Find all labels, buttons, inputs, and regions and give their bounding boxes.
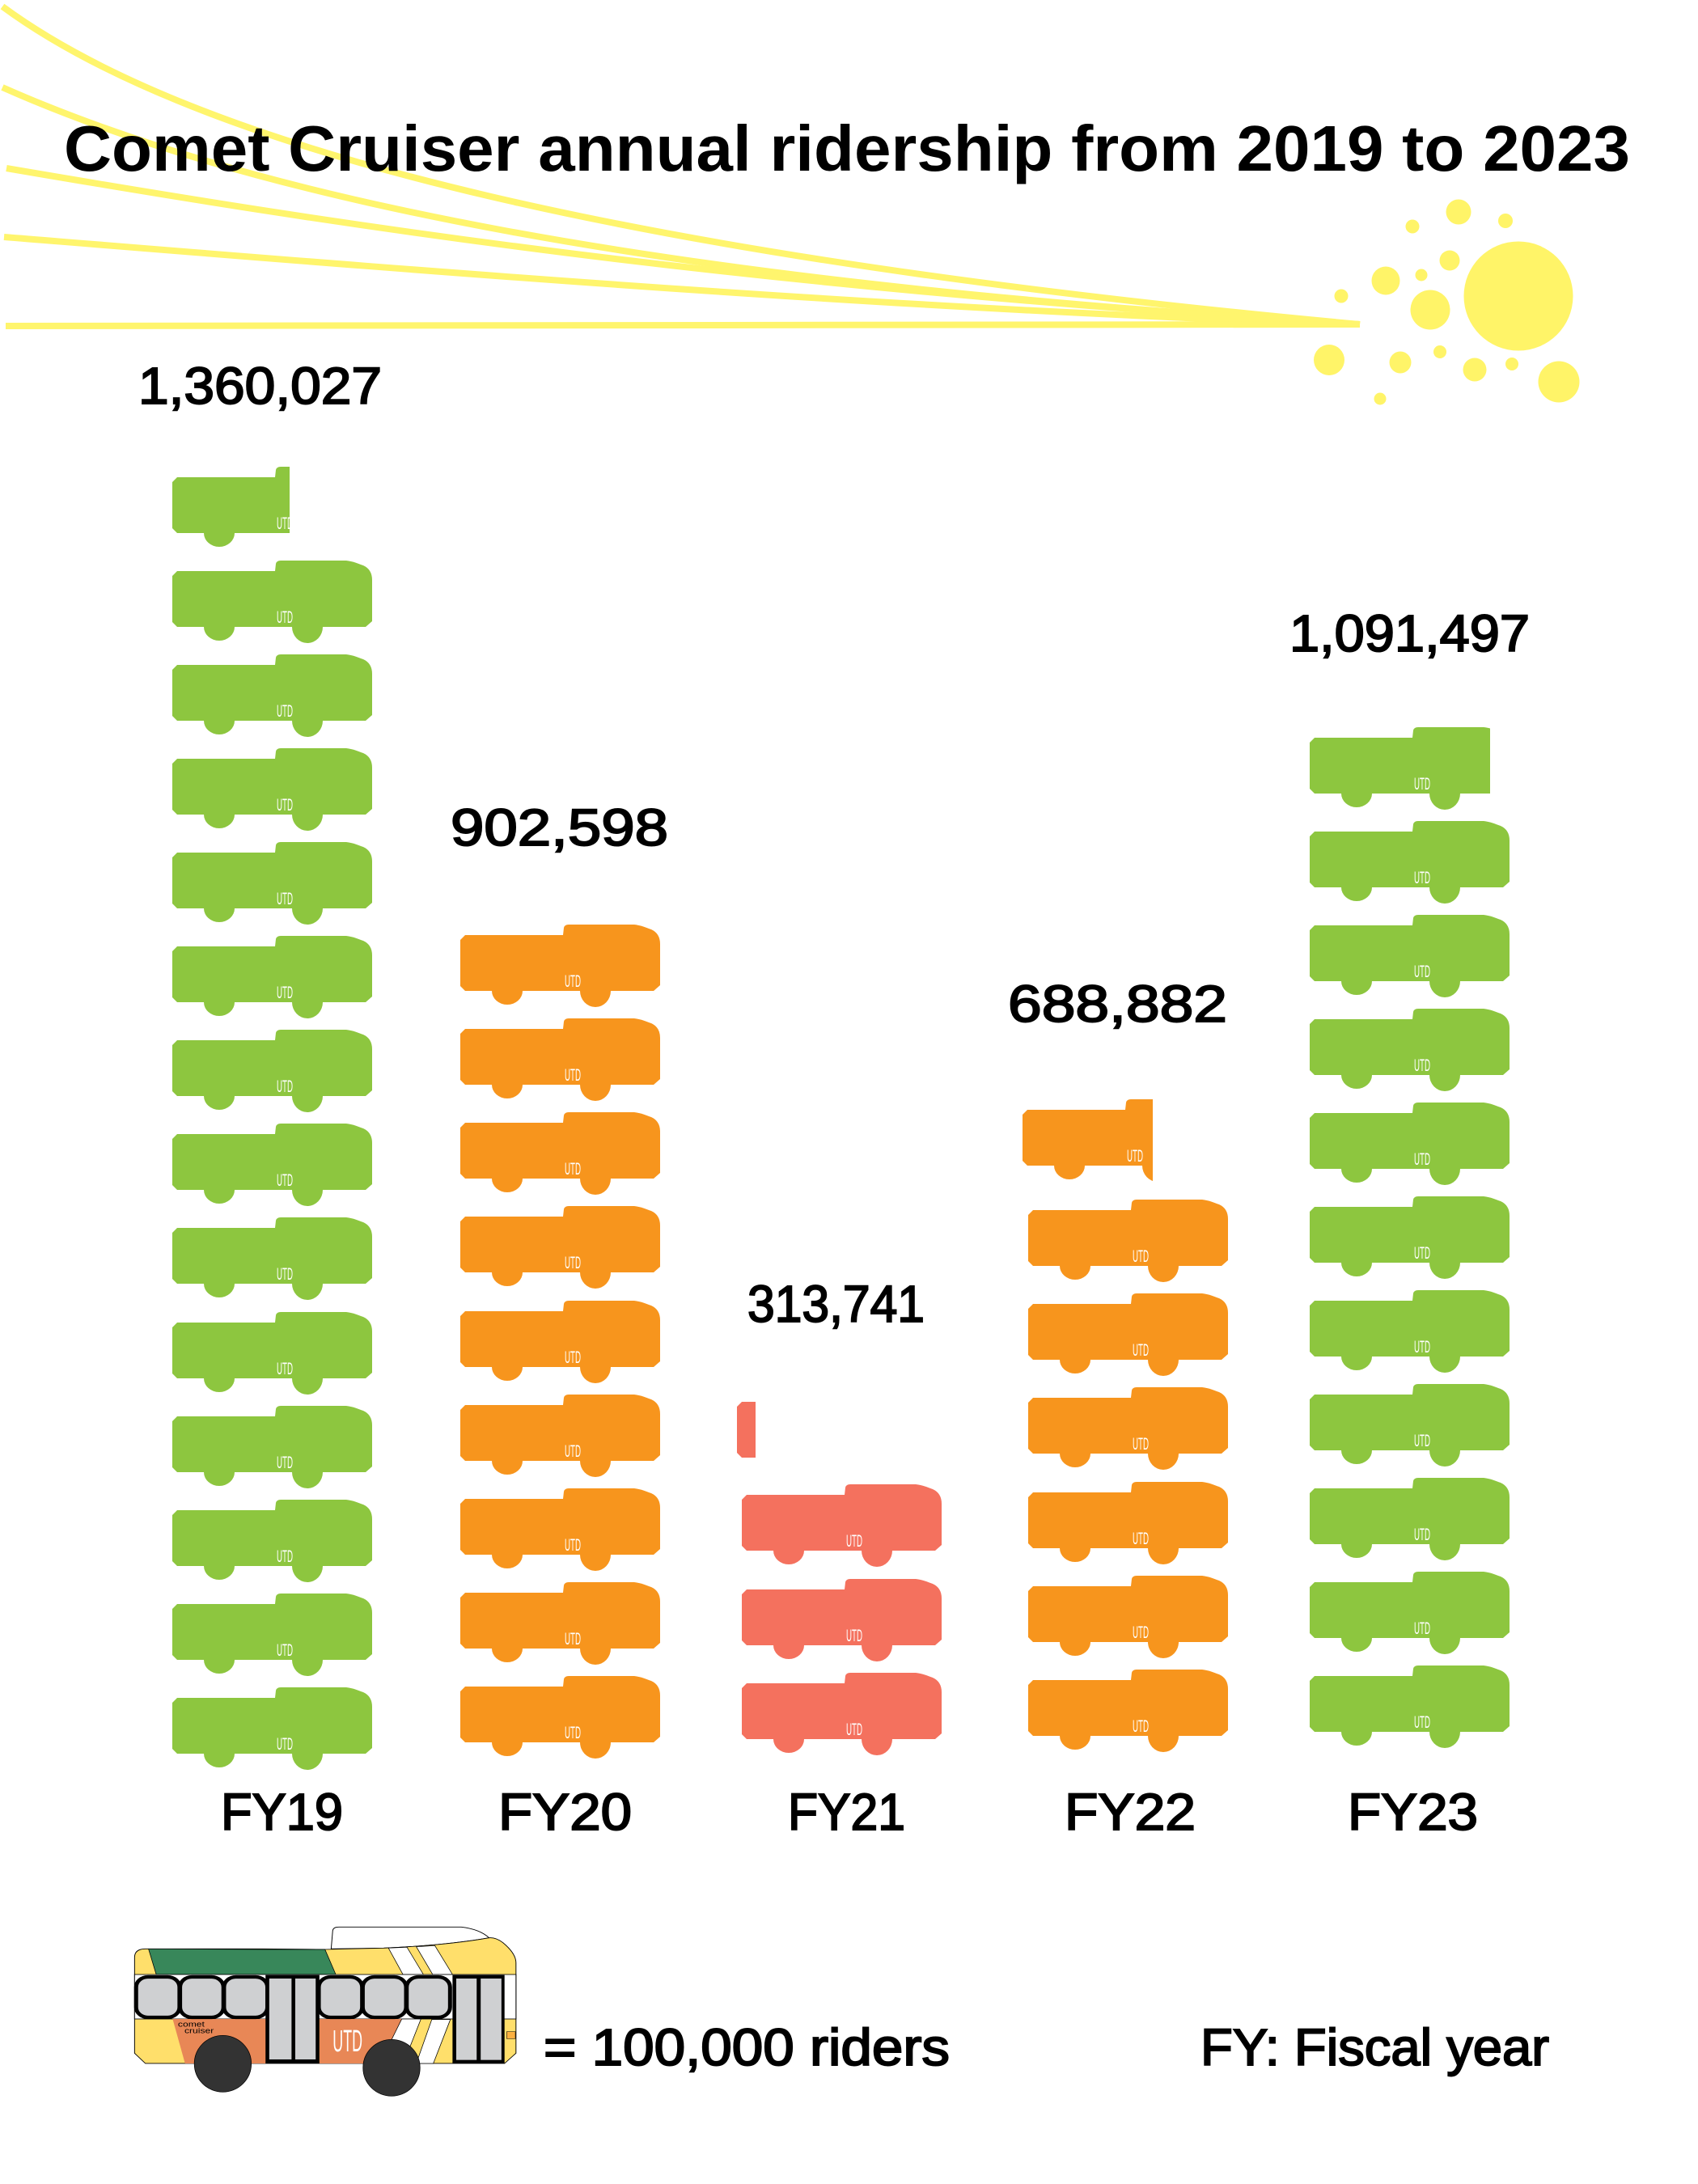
bus <box>1310 1290 1510 1373</box>
partial bus <box>172 467 293 547</box>
bus <box>742 1579 942 1661</box>
bus: UTD <box>846 1721 862 1739</box>
bus: UTD <box>565 1160 581 1179</box>
bus column: FY22 <box>1023 1099 1228 1752</box>
bus <box>1028 1293 1228 1376</box>
bus: UTD <box>1414 869 1430 887</box>
bus <box>1028 1576 1228 1658</box>
bus <box>172 842 372 925</box>
bus roof unit <box>331 1927 489 1949</box>
bus: UTD <box>277 1265 293 1284</box>
bus: UTD <box>1414 1526 1430 1544</box>
bus: UTD <box>277 890 293 908</box>
wheels <box>194 2035 420 2096</box>
bus <box>1310 915 1510 997</box>
bus <box>460 1018 660 1101</box>
bus: UTD <box>277 1077 293 1096</box>
bus: UTD <box>1133 1435 1149 1454</box>
bus: UTD <box>1133 1717 1149 1736</box>
wordmark: cruiser <box>184 2027 214 2035</box>
bus column: FY23 <box>1310 727 1510 1748</box>
bus <box>1310 1009 1510 1091</box>
bus: UTD <box>565 1254 581 1272</box>
partial bus: UTD <box>277 514 293 533</box>
bus <box>1310 1478 1510 1560</box>
lower stripes <box>392 2019 451 2063</box>
bus <box>460 1582 660 1665</box>
bus <box>460 1488 660 1571</box>
bus <box>172 936 372 1018</box>
wordmark: comet <box>178 2021 205 2029</box>
window band <box>134 1974 516 2019</box>
bus <box>460 1112 660 1195</box>
bus <box>1310 1666 1510 1748</box>
bus <box>1310 1384 1510 1467</box>
bus: UTD <box>1414 1244 1430 1263</box>
sun and dots <box>1314 199 1579 404</box>
bus <box>1028 1387 1228 1470</box>
bus <box>172 1030 372 1112</box>
bus <box>172 1312 372 1395</box>
bus <box>1028 1482 1228 1564</box>
partial bus <box>1310 727 1490 810</box>
bus: UTD <box>565 1066 581 1085</box>
bus <box>1310 1572 1510 1654</box>
legend icon: Comet Cruiser bus: UTD <box>332 2024 362 2058</box>
bus: UTD <box>277 1360 293 1378</box>
bus: UTD <box>1414 1338 1430 1357</box>
value label: FY20: 902,598 <box>451 798 668 857</box>
bus: UTD <box>565 1630 581 1649</box>
title: Comet Cruiser annual ridership from 2019 to 2023 <box>64 112 1630 184</box>
value label: FY21: 313,741 <box>747 1275 925 1333</box>
bus <box>460 925 660 1007</box>
bus <box>1028 1670 1228 1752</box>
bus <box>172 1500 372 1582</box>
windows <box>136 1977 450 2017</box>
value label: FY19: 1,360,027 <box>138 357 382 415</box>
bus: UTD <box>846 1627 862 1645</box>
bus <box>172 1687 372 1770</box>
bus: UTD <box>277 1171 293 1190</box>
partial bus: UTD <box>1414 775 1430 794</box>
bus <box>172 1594 372 1676</box>
bus: UTD <box>277 702 293 721</box>
bus <box>172 654 372 737</box>
wordmark <box>178 2021 214 2035</box>
bus: UTD <box>565 1536 581 1555</box>
partial bus <box>737 1402 756 1458</box>
axis label: FY22: FY22 <box>1065 1783 1196 1841</box>
bus <box>1310 821 1510 904</box>
bus column: FY20 <box>460 925 660 1759</box>
bus: UTD <box>1414 1432 1430 1450</box>
value label: FY22: 688,882 <box>1008 975 1227 1033</box>
door <box>265 1975 320 2063</box>
bus column: FY19 <box>172 467 372 1770</box>
bus <box>460 1395 660 1477</box>
lower orange panels <box>172 2019 402 2063</box>
bus <box>460 1676 660 1759</box>
bus: UTD <box>565 1442 581 1461</box>
legend icon: Comet Cruiser bus <box>134 1927 516 2096</box>
bus: UTD <box>1133 1530 1149 1548</box>
bus: UTD <box>565 1348 581 1367</box>
bus <box>1310 1103 1510 1185</box>
bus: UTD <box>277 1547 293 1566</box>
bus: UTD <box>1414 1056 1430 1075</box>
bus <box>1310 1196 1510 1279</box>
axis label: FY19: FY19 <box>221 1783 343 1841</box>
bus: UTD <box>1414 963 1430 981</box>
bus <box>172 748 372 831</box>
bus <box>742 1673 942 1755</box>
bus <box>460 1301 660 1383</box>
bus: UTD <box>1414 1150 1430 1169</box>
fiscal year note: FY: Fiscal year <box>1200 2018 1549 2076</box>
upper stripes <box>388 1945 452 1974</box>
bus: UTD <box>1414 1619 1430 1638</box>
bus: UTD <box>277 1641 293 1660</box>
axis label: FY20: FY20 <box>498 1783 632 1841</box>
bus: UTD <box>565 1724 581 1742</box>
value label: FY23: 1,091,497 <box>1289 604 1530 662</box>
sun rays <box>2 6 1360 326</box>
bus: UTD <box>1133 1247 1149 1266</box>
bus: UTD <box>277 796 293 815</box>
bus <box>172 1217 372 1300</box>
bus: UTD <box>277 1454 293 1472</box>
bus <box>1028 1200 1228 1282</box>
green panel <box>149 1949 336 1974</box>
bus <box>172 1406 372 1488</box>
bus: UTD <box>1133 1623 1149 1642</box>
bus: UTD <box>277 1735 293 1754</box>
bus <box>460 1206 660 1289</box>
bus: UTD <box>565 972 581 991</box>
bus: UTD <box>846 1532 862 1551</box>
bus <box>172 1124 372 1206</box>
bus <box>742 1484 942 1567</box>
front door <box>452 1975 505 2063</box>
bus column: FY21 <box>737 1391 942 1755</box>
partial bus: UTD <box>1127 1147 1143 1166</box>
bus: UTD <box>277 984 293 1002</box>
axis label: FY23: FY23 <box>1348 1783 1478 1841</box>
bus: UTD <box>1414 1713 1430 1732</box>
bus: UTD <box>277 608 293 627</box>
bus <box>172 561 372 643</box>
headlight <box>506 2032 515 2038</box>
bus: UTD <box>1133 1341 1149 1360</box>
legend text: = 100,000 riders <box>544 2018 950 2076</box>
partial bus <box>1023 1099 1153 1181</box>
bus body <box>134 1938 516 2063</box>
axis label: FY21: FY21 <box>788 1783 905 1841</box>
